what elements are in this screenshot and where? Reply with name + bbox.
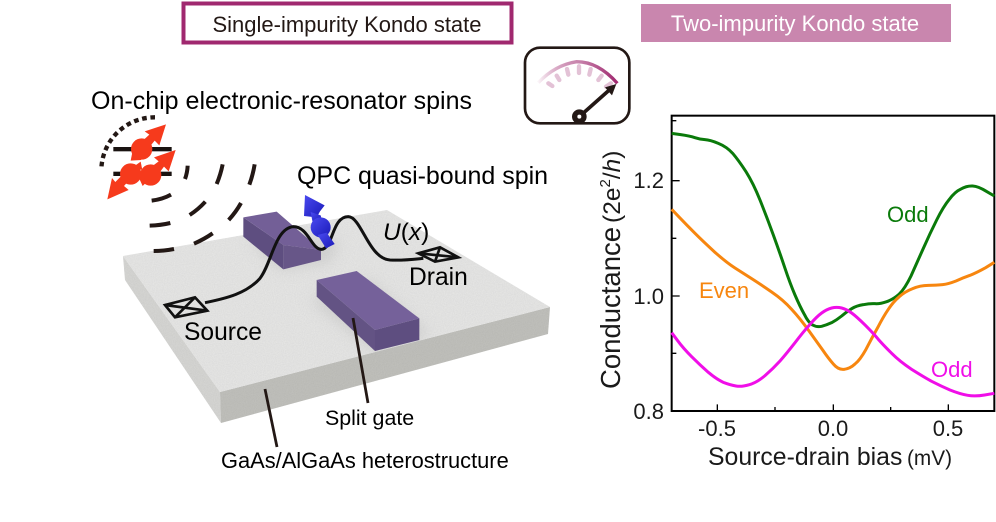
icon: gauge	[525, 48, 629, 123]
label: drain: Drain	[409, 264, 468, 291]
chart: conductance vs source-drain bias	[595, 116, 994, 471]
x tick labels: 0.0	[818, 416, 848, 441]
label: U(x): U(x)	[383, 219, 429, 246]
heading: two-impurity Kondo state	[641, 4, 951, 42]
y tick labels: 1.0	[633, 284, 664, 309]
icon: source contact	[165, 297, 207, 317]
series label: odd green: Odd	[887, 202, 929, 227]
heading: single-impurity Kondo state	[184, 4, 512, 42]
heading: single-impurity Kondo state: Single-impurity Kondo state	[212, 12, 482, 37]
curve: odd magenta	[672, 307, 994, 396]
x tick labels	[698, 416, 963, 441]
series label: odd magenta: Odd	[931, 357, 973, 382]
label: split gate: Split gate	[325, 406, 414, 430]
y tick labels	[633, 168, 664, 424]
x tick labels: 0.5	[933, 416, 963, 441]
y tick labels: 0.8	[633, 399, 664, 424]
icon: drain contact	[418, 247, 458, 262]
device: heterostructure slab	[123, 210, 550, 423]
icon: QPC blue spin	[304, 195, 335, 248]
y axis title: h)	[599, 151, 626, 172]
label: QPC quasi-bound spin: QPC quasi-bound spin	[297, 162, 548, 190]
x tick labels: -0.5	[698, 416, 736, 441]
heading: two-impurity Kondo state: Two-impurity Kondo state	[671, 11, 919, 36]
x axis title: Source-drain bias	[708, 444, 902, 471]
device: back split gate	[243, 212, 321, 269]
icon: resonator spins	[101, 117, 176, 199]
curve: even orange	[672, 209, 994, 369]
leader line: heterostructure	[265, 389, 277, 447]
device: front split gate	[317, 271, 419, 351]
x axis title: (mV)	[907, 447, 952, 470]
leader line: split gate	[353, 318, 368, 403]
y axis title: Conductance(2e	[595, 188, 626, 389]
y tick labels: 1.2	[633, 168, 664, 193]
icon: microwave wave arcs	[150, 164, 255, 251]
label: source: Source	[184, 319, 262, 346]
device: gate shadows	[250, 240, 430, 352]
label: heterostructure: GaAs/AlGaAs heterostructure	[221, 448, 509, 473]
y axis title: /	[599, 172, 626, 179]
series label: even orange: Even	[699, 278, 749, 303]
y axis title: 2	[597, 179, 614, 188]
curve: potential U(x) wire	[205, 217, 423, 303]
label: on-chip electronic-resonator spins: On-chip electronic-resonator spins	[91, 87, 472, 115]
chart plot frame and ticks	[672, 116, 994, 411]
curve: odd green	[672, 133, 994, 327]
